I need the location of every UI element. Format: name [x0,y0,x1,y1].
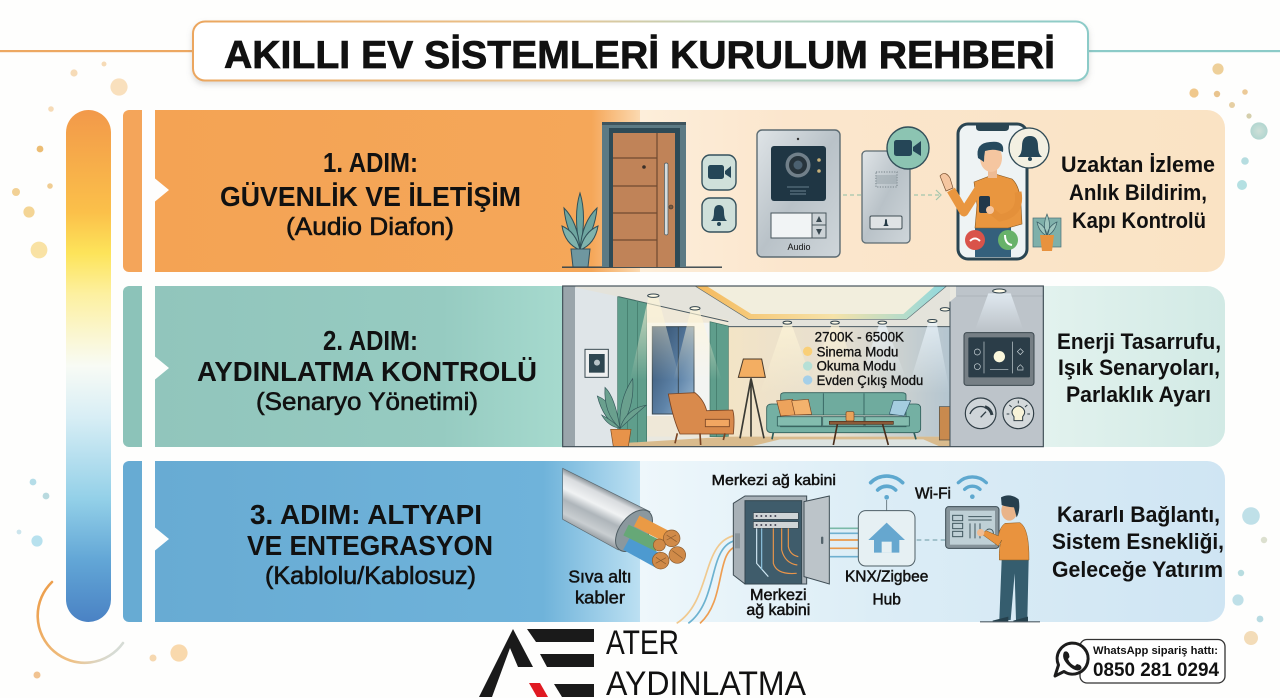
frame [563,286,1043,447]
step 2 heading: (Senaryo Yönetimi) [256,388,478,416]
step 3 benefits: Kararlı Bağlantı, [1057,502,1220,527]
step 3 heading: 3. ADIM: ALTYAPI [250,499,482,530]
cabinet and hub labels: Merkezi [750,587,807,604]
network cabinet [733,496,829,584]
whatsapp order line [1055,640,1225,683]
ground line [980,621,1040,622]
illustration: infrastructure [563,468,1040,623]
step 2 background [155,286,1225,447]
step 1 heading [220,147,521,241]
dashed link [917,537,945,542]
label: concealed cables [568,567,632,607]
window [647,323,710,416]
cabinet and hub labels: Hub [872,591,901,608]
spotlights [648,294,950,324]
color temperature labels: 2700K - 6500K [815,330,904,345]
header rule right [1086,50,1280,52]
cabinet [939,407,950,440]
logo: Ater Aydınlatma [479,624,806,698]
cushions [777,399,911,416]
step 3 benefits [1052,502,1224,582]
step 2 heading [197,325,537,416]
hub wires [830,528,858,557]
icon: intercom panel [757,130,840,257]
hub [858,500,915,566]
ground line [562,266,722,268]
sofa [767,393,921,439]
cabinet and hub labels [712,473,951,619]
step 1 benefits: Kapı Kontrolü [1072,208,1206,233]
step 3 benefits: Sistem Esnekliği, [1052,529,1224,554]
label: concealed cables: kabler [575,587,625,607]
decorative dots right [1189,63,1268,645]
icon: small plant [1033,214,1061,251]
step 1 benefits [1061,152,1215,233]
label: concealed cables: Sıva altı [568,567,632,587]
spectrum bar [66,110,111,622]
step 3 tab [123,461,142,622]
logo mark [479,629,594,697]
icon: bell bubble [1009,128,1049,168]
icon: wifi [958,477,986,499]
step 3 heading [247,499,493,590]
floor lamp [738,359,765,438]
cable bundle [563,468,686,569]
cabinet and hub labels: KNX/Zigbee [845,569,928,586]
step 2 tab [123,286,142,447]
icon: intercom panel: Audio [787,242,811,252]
cabinet and hub labels: Merkezi ağ kabini [712,473,836,489]
color temperature labels: Sinema Modu [817,344,898,359]
logo text: ATER [606,624,679,662]
armchair [668,393,734,445]
step 1 benefits: Anlık Bildirim, [1069,180,1207,205]
step 2 heading: 2. ADIM: [323,325,418,356]
icon: door unit [862,151,910,243]
step 1 heading: (Audio Diafon) [286,213,454,241]
step 1 background [155,110,1225,272]
left wall [563,286,728,447]
phone box [1080,640,1225,683]
ceiling [575,286,950,327]
step 2 benefits: Enerji Tasarrufu, [1057,329,1221,354]
step 1 heading: GÜVENLİK VE İLETİŞİM [220,181,521,212]
phone number: 0850 281 0294 [1093,660,1219,681]
person [977,495,1029,621]
header rule left [0,50,195,52]
color temperature labels [803,330,923,388]
wall panel [946,507,999,548]
icon: wifi hub [871,476,903,500]
right wall control [950,286,1043,447]
step 3 background [155,461,1225,622]
back wall [728,327,950,437]
icon: video bubble [887,127,929,169]
coffee table [829,412,893,445]
potted plant [597,379,646,447]
whatsapp label: WhatsApp sipariş hattı: [1093,645,1218,657]
icon: camera tile [702,155,736,190]
cabinet and hub labels: ağ kabini [746,602,810,619]
step 3 benefits: Geleceğe Yatırım [1052,557,1223,582]
step 2 benefits: Işık Senaryoları, [1058,355,1220,380]
panel: step 3 infrastructure [123,461,1225,623]
icon: potted plant [562,193,598,267]
incoming wires [677,535,738,623]
step 2 benefits [1057,329,1221,407]
color temperature labels: Okuma Modu [817,359,896,374]
step 1 benefits: Uzaktan İzleme [1061,152,1215,177]
wall thermostat [585,349,608,377]
step 2 heading: AYDINLATMA KONTROLÜ [197,356,537,387]
step 3 heading: VE ENTEGRASYON [247,530,493,561]
color temperature labels: Evden Çıkış Modu [817,373,923,388]
panel: step 2 lighting control [123,286,1225,447]
icon: whatsapp [1055,643,1088,676]
icon: phone with person [940,124,1027,259]
decorative dots left [12,62,188,678]
step 1 heading: 1. ADIM: [323,147,418,178]
curtains [618,297,728,443]
step 3 heading: (Kablolu/Kablosuz) [265,562,476,590]
panel: step 1 security and communication [123,110,1225,272]
illustration: living room [563,286,1043,447]
logo text [606,624,806,698]
cabinet and hub labels: Wi-Fi [915,485,951,502]
icon: bell tile [702,198,736,232]
step 2 benefits: Parlaklık Ayarı [1066,382,1211,407]
icon: door [602,122,686,267]
title [193,22,1088,80]
arrow: dashed connection [843,190,941,200]
light cones [630,297,950,393]
title: AKILLI EV SİSTEMLERİ KURULUM REHBERİ [224,34,1055,77]
step 1 tab [123,110,142,272]
floor [618,437,950,447]
ceiling tray [695,286,947,319]
decorative arc [38,582,123,663]
